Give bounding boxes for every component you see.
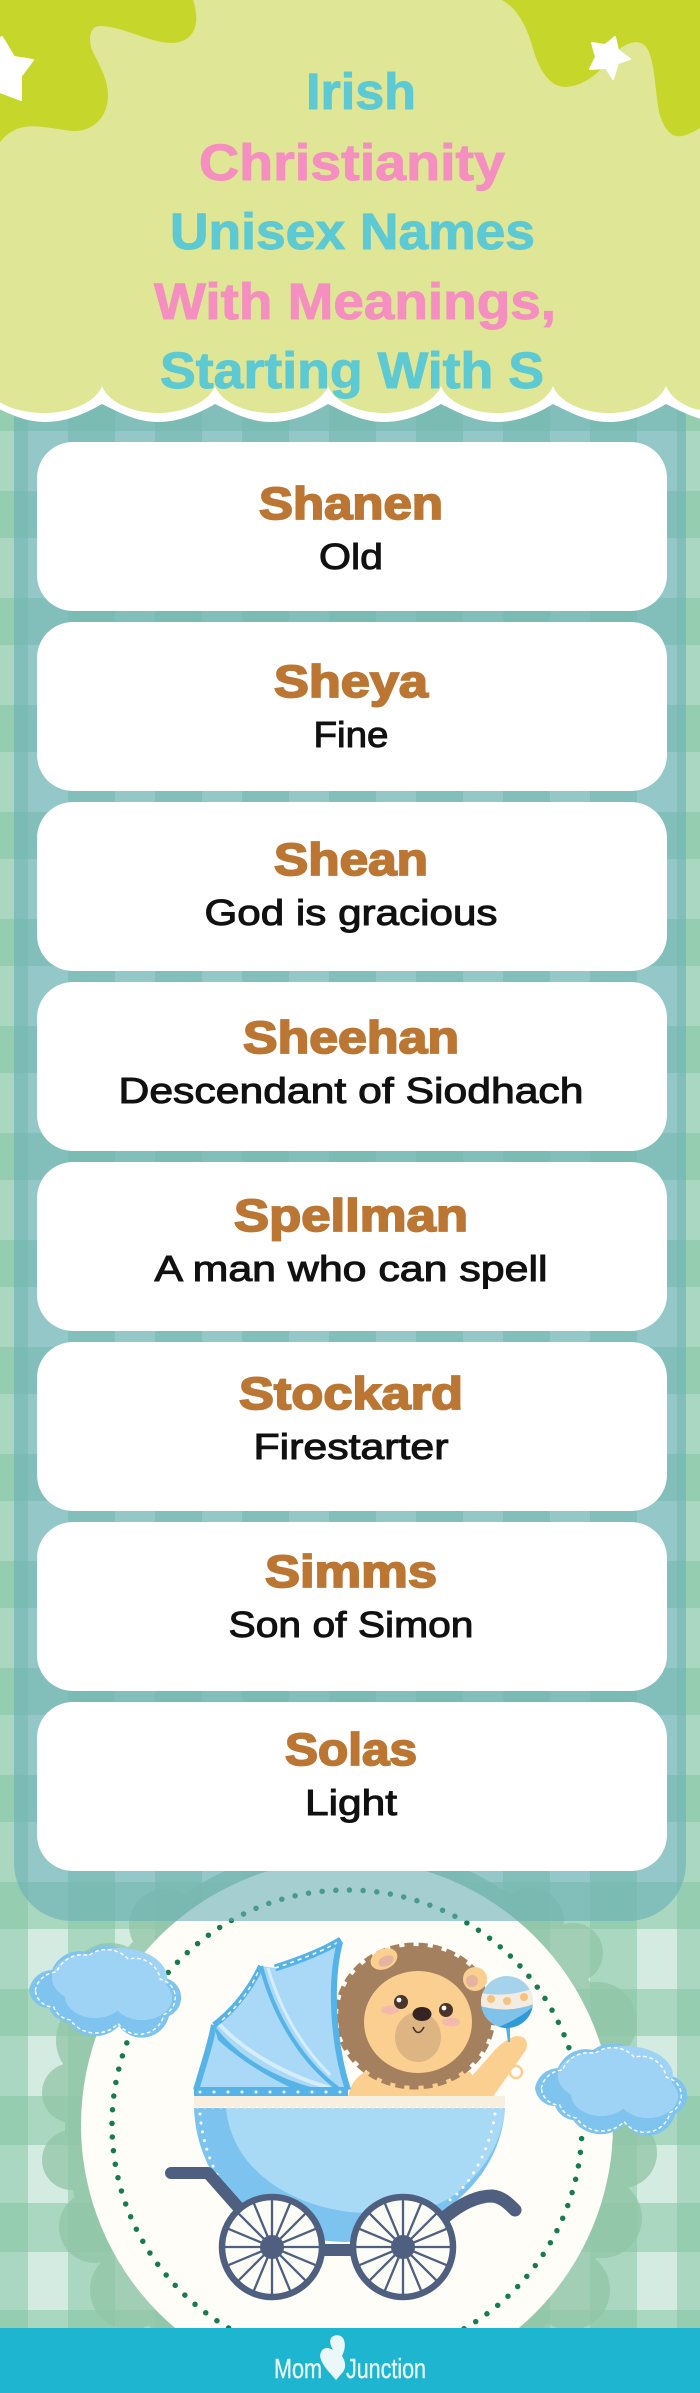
icon: right cloud [535, 2044, 687, 2136]
meaning: Son of Simon [228, 1604, 474, 1645]
pram handles and axle [171, 2173, 515, 2250]
title: Christianity [199, 134, 506, 191]
name: Spellman [234, 1190, 468, 1241]
icon: rattle [480, 1975, 534, 2078]
lion arm [452, 2036, 527, 2098]
meaning: A man who can spell [154, 1248, 548, 1289]
icon: left cloud [29, 1946, 181, 2038]
icon: star right [590, 37, 630, 79]
title: Unisex Names [170, 203, 535, 260]
pram trim [194, 2096, 505, 2108]
logo text: Mom [274, 2353, 322, 2384]
icon: star left [0, 37, 33, 100]
logo text: Junction [346, 2353, 426, 2384]
card: Shanen [37, 442, 667, 611]
meaning: Old [319, 536, 383, 577]
card: Sheya [37, 622, 667, 791]
footer bar [0, 2328, 700, 2393]
title: Irish [306, 63, 416, 120]
title: Starting With S [160, 342, 544, 399]
dotted ring [112, 1890, 582, 2360]
pram wheel right [353, 2197, 453, 2297]
name: Shean [274, 834, 428, 885]
lion body [348, 2068, 491, 2098]
name: Shanen [259, 478, 443, 529]
card: Sheehan [37, 982, 667, 1151]
icon: logo mother and heart [320, 2335, 345, 2380]
name: Sheya [274, 656, 429, 707]
MomJunction logo [274, 2335, 426, 2384]
name: Solas [285, 1724, 417, 1775]
meaning: Firestarter [254, 1426, 449, 1467]
name: Stockard [239, 1368, 463, 1419]
title [154, 63, 556, 399]
header band [0, 0, 700, 422]
pram canopy [194, 1940, 348, 2097]
card: Solas [37, 1702, 667, 1871]
card: Simms [37, 1522, 667, 1691]
title: With Meanings, [154, 273, 556, 330]
meaning: Fine [314, 714, 388, 755]
name: Simms [265, 1546, 437, 1597]
meaning: Descendant of Siodhach [118, 1070, 584, 1111]
name: Sheehan [243, 1012, 459, 1063]
card: Shean [37, 802, 667, 971]
pram bowl [194, 2108, 505, 2242]
cream circle [81, 1859, 613, 2391]
lion head [338, 1944, 492, 2086]
card: Spellman [37, 1162, 667, 1331]
card: Stockard [37, 1342, 667, 1511]
scalloped green blob behind the circle [42, 1871, 657, 2328]
pram wheel left [222, 2197, 322, 2297]
illustration: lion in pram [171, 1940, 534, 2297]
translucent teal panel [14, 360, 686, 1921]
meaning: Light [305, 1782, 397, 1823]
decorative blob: top right [502, 0, 700, 136]
meaning: God is gracious [204, 892, 498, 933]
decorative blob: top left [0, 0, 196, 142]
